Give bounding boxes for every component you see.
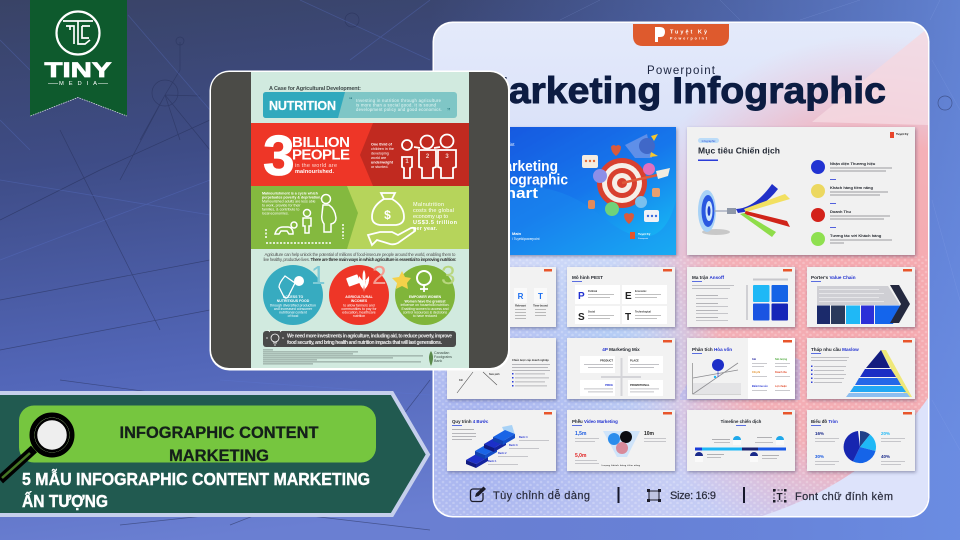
circle: empower women: Women have the greatest	[404, 300, 446, 304]
slide: Timeline chiến dịch: Timeline chiến dịch	[721, 419, 762, 424]
logo tab: Tuyệt Kỳ Powerpoint: Powerpoint	[670, 36, 708, 40]
section: malnutrition cycle and cost: to work, provide for their	[262, 204, 301, 208]
circle: agricultural incomes: nutrition	[353, 314, 365, 318]
logo tab: Tuyệt Kỳ Powerpoint	[633, 24, 729, 46]
section: malnutrition cycle and cost: Malnourishment is a cycle which	[262, 192, 318, 196]
slide: PEST analysis: Technological	[635, 310, 651, 314]
icon: three children	[402, 134, 456, 178]
slide: PEST analysis: E	[625, 291, 632, 302]
slide: SMART goals: Relevant	[515, 304, 526, 308]
pill: Infographic Content Marketing: MARKETING	[169, 446, 269, 465]
logo: small Tuyệt Kỳ: Tuyệt Kỳ	[638, 232, 651, 236]
slide: blue cover	[447, 127, 676, 255]
banner: nutrition quote: Investing in nutrition through agriculture	[356, 98, 442, 103]
section: 3 billion people: One third of	[371, 142, 393, 146]
slide: Ansoff matrix	[687, 267, 795, 327]
icon: magnifying glass	[0, 415, 72, 480]
slide: blue cover: Powerpoint	[492, 142, 515, 147]
slide: PEST analysis: Mô hình PEST	[572, 275, 603, 280]
icon: family lifecycle	[266, 194, 343, 243]
section: 3 billion people: 1	[405, 159, 409, 165]
circle: access to nutritious food: and increased consumer	[274, 307, 313, 311]
slide: Phễu Video Marketing: 5,0m	[575, 453, 587, 459]
section: 3 billion people: in the world are	[295, 163, 337, 169]
section: malnutrition cycle and cost: per year.	[413, 226, 437, 232]
circle: agricultural incomes: AGRICULTURAL	[345, 295, 374, 299]
text block: agriculture intro: live healthy, productive lives. There are three main ways in which agriculture is essential to improving nutrition:	[264, 257, 457, 262]
slide: Phân tích Hòa vốn: Doanh thu	[775, 371, 787, 374]
circle: access to nutritious food: 1	[311, 260, 325, 290]
slide: Biểu đồ Tròn pie chart: Biểu đồ Tròn	[811, 419, 838, 424]
slide: Maslow pyramid	[807, 338, 915, 399]
section: 3 billion people: 2	[426, 154, 430, 160]
slide: Quy trình 4 Bước: Bước 1	[488, 460, 497, 463]
slide: Mục tiêu Chiến dịch: Tuyệt Kỳ	[896, 132, 909, 136]
slide: PEST analysis: T	[625, 312, 631, 323]
footer feature: size 16:9	[647, 489, 716, 502]
slide: Quy trình 4 Bước	[447, 410, 556, 471]
circle: access to nutritious food	[263, 260, 325, 325]
slide: Phễu Video Marketing: 1,5m	[575, 431, 587, 437]
section: malnutrition cycle and cost: costs the global	[413, 208, 454, 214]
slide: Phễu Video Marketing: Lượng khách hàng tiềm năng	[602, 464, 641, 467]
banner: nutrition quote	[263, 92, 457, 118]
slide: 4P Marketing Mix: 4P Marketing Mix	[602, 347, 640, 352]
callout: more investments needed: We need more investments in agriculture, including aid, to reduce poverty, improve	[287, 334, 452, 340]
slide: Biểu đồ Tròn pie chart: 16%	[815, 431, 824, 436]
text block: references and funder logo	[263, 350, 452, 366]
text block: references and funder logo: Canadian	[434, 351, 449, 355]
circle: access to nutritious food: nutritional content	[279, 310, 307, 314]
slide: Biểu đồ Tròn pie chart: 40%	[881, 454, 890, 459]
ribbon: Tiny Media logo: MEDIA	[59, 81, 97, 87]
section: 3 billion people: BILLION	[292, 134, 350, 151]
slide: 4P Marketing Mix: PROMOTIONAL	[630, 383, 650, 387]
section: 3 billion people: PEOPLE	[292, 146, 350, 164]
circle: agricultural incomes: INCOMES	[351, 299, 368, 303]
icon: target with arrow	[597, 158, 670, 208]
slide: Maslow pyramid: Tháp nhu cầu Maslow	[811, 347, 859, 352]
slide: blue cover: Main	[512, 231, 522, 236]
slide: PEST analysis	[567, 267, 675, 327]
circle: access to nutritious food: through diversified production	[270, 304, 316, 308]
slide: Phân tích Hòa vốn: Điểm hòa vốn	[752, 385, 768, 388]
circle: empower women: EMPOWER WOMEN	[409, 295, 442, 299]
circle: agricultural incomes: to allow farmers and	[343, 304, 375, 308]
slide: Mục tiêu Chiến dịch: Infographic	[702, 139, 716, 143]
section: malnutrition cycle and cost: Malnutrition	[413, 202, 444, 208]
circle: empower women: Enabling women to access and	[402, 307, 449, 311]
slide: Quy trình 4 Bước: Bước 4	[519, 436, 528, 439]
banner: nutrition quote: is more than a social good. It is sound	[356, 102, 437, 108]
heading: ấn tượng: ẤN TƯỢNG	[22, 490, 108, 511]
slide: Biểu đồ Tròn pie chart: 20%	[881, 431, 890, 436]
slide: 4P Marketing Mix: PRODUCT	[600, 358, 613, 362]
section: malnutrition cycle and cost: economy up to	[413, 214, 448, 220]
circle: empower women: influence on household nutrition.	[401, 303, 449, 307]
subtitle: Powerpoint: Powerpoint	[647, 65, 716, 77]
slide: Phân tích Hòa vốn: Giá	[752, 358, 757, 361]
circle: agricultural incomes	[329, 260, 389, 325]
list: campaign goals: Nhận diện Thương hiệu	[830, 161, 876, 166]
slide: PEST analysis: S	[578, 312, 585, 323]
section: 3 billion people: 3	[263, 124, 295, 188]
pill: Infographic Content Marketing	[19, 406, 376, 465]
section: 3 billion people	[251, 123, 469, 188]
banner: nutrition quote: “	[349, 97, 352, 104]
slide: SMART goals: R	[518, 292, 524, 301]
section: 3 billion people: developing	[371, 152, 389, 156]
list: campaign goals: Khách hàng tiềm năng	[830, 185, 873, 190]
section: malnutrition cycle and cost: Malnourished adults are less able	[262, 200, 316, 204]
slide: Mục tiêu Chiến dịch: Mục tiêu Chiến dịch	[698, 146, 780, 156]
slide: break-even chart: Kill	[459, 379, 463, 382]
slide: Quy trình 4 Bước: Quy trình 4 Bước	[452, 419, 489, 424]
slide: SMART goals: T	[538, 292, 543, 301]
circle: empower women	[392, 260, 455, 325]
slide: Quy trình 4 Bước: Bước 3	[509, 444, 518, 447]
slide: Phân tích Hòa vốn	[687, 338, 795, 399]
slide: Phân tích Hòa vốn: Sản lượng	[775, 358, 788, 361]
circle: access to nutritious food: NUTRITIOUS FOOD	[277, 299, 310, 303]
logo tab: Tuyệt Kỳ Powerpoint: Tuyệt Kỳ	[670, 30, 708, 36]
footer feature: easy customization: Tùy chỉnh dễ dàng	[493, 489, 590, 502]
divider	[743, 487, 745, 503]
icon: TC monogram	[56, 12, 100, 54]
section: 3 billion people: children in the	[371, 147, 394, 151]
text block: agriculture intro: Agriculture can help unlock the potential of millions of food-insecure people around the world, enabling them to	[264, 252, 456, 257]
slide: Mục tiêu Chiến dịch	[687, 127, 915, 255]
icon: target with ribbons	[698, 184, 790, 237]
text block: agriculture intro	[264, 252, 457, 262]
section: malnutrition cycle and cost: $	[384, 208, 391, 222]
text block: references and funder logo: Bank	[434, 359, 442, 363]
list: campaign goals	[811, 160, 892, 246]
circle: agricultural incomes: 2	[372, 260, 386, 290]
section: 3 billion people: world are	[371, 156, 386, 160]
icon: social reaction bubbles	[582, 145, 660, 224]
slide: break-even chart: New path	[489, 373, 500, 376]
icon: megaphone	[625, 134, 658, 158]
banner: article title	[0, 393, 428, 515]
circle: empower women: to have reduced	[413, 314, 437, 318]
section: malnutrition cycle and cost: families, & contribute to	[262, 208, 299, 212]
footer feature: attached font: Font chữ đính kèm	[795, 491, 893, 503]
slide: blue cover: Marketing	[493, 159, 558, 175]
pill: Infographic Content Marketing: INFOGRAPHIC CONTENT	[120, 423, 319, 442]
section: 3 billion people: underweight	[371, 160, 394, 164]
slide: Biểu đồ Tròn pie chart	[807, 410, 915, 471]
icon: money bag in hand	[368, 193, 415, 245]
slide: Phân tích Hòa vốn: Phân tích Hòa vốn	[692, 346, 732, 352]
title: Marketing Infographic: Marketing Infographic	[476, 70, 886, 111]
logo: small Tuyệt Kỳ	[630, 232, 651, 240]
slide: SMART goals	[447, 267, 556, 327]
circle: empower women: 3	[441, 260, 455, 290]
circle: agricultural incomes: communities to pay for	[341, 307, 377, 311]
callout: more investments needed	[263, 330, 456, 347]
banner: nutrition quote: NUTRITION	[269, 99, 336, 113]
slide: blue cover: Chart	[493, 186, 538, 202]
heading: A Case for Agricultural Development: A Case for Agricultural Development:	[269, 86, 361, 92]
ribbon: Tiny Media logo: TINY	[44, 58, 112, 82]
divider	[618, 487, 620, 503]
slide: 4P Marketing Mix: PLACE	[630, 358, 639, 362]
slide: Porter's Value Chain: Porter's Value Chain	[811, 275, 856, 280]
callout: more investments needed: food security, and bring health and nutrition impacts that will last generations.	[287, 340, 443, 346]
ribbon: Tiny Media logo	[30, 0, 127, 116]
slide: Quy trình 4 Bước: Bước 2	[498, 452, 507, 455]
chart: pie	[844, 431, 876, 463]
slide: Phễu Video Marketing	[567, 410, 675, 471]
banner: nutrition quote: ”	[447, 108, 450, 115]
slide: Phân tích Hòa vốn: Lợi nhuận	[775, 385, 787, 388]
panel: Marketing Infographic PowerPoint preview	[432, 22, 930, 518]
slide: PEST analysis: P	[578, 291, 585, 302]
slide: 4P Marketing Mix	[567, 338, 675, 399]
circle: access to nutritious food: of food	[288, 314, 298, 318]
slide: PEST analysis: Political	[588, 290, 598, 293]
section: malnutrition cycle and cost	[251, 186, 469, 249]
section: 3 billion people: or stunted.	[371, 165, 388, 169]
section: malnutrition cycle and cost: US$3.5 trillion	[413, 220, 458, 226]
logo: small Tuyệt Kỳ: Powerpoint	[638, 237, 648, 240]
slide: blue cover: / Tuyetkipowerpoint	[512, 237, 540, 241]
footer feature: size 16:9: Size: 16:9	[670, 490, 716, 502]
slide: SMART goals: Time-bound	[533, 304, 548, 308]
circle: empower women: control resources & decisions	[403, 310, 447, 314]
slide: Ansoff matrix: Ma trận Ansoff	[692, 275, 724, 280]
slide: Phễu Video Marketing: 10m	[644, 431, 655, 437]
slide: break-even chart	[447, 338, 556, 399]
slide: Phân tích Hòa vốn: Chi phí	[752, 371, 760, 374]
slide: Timeline chiến dịch	[687, 410, 795, 471]
slide: PEST analysis: Social	[588, 310, 595, 314]
section: malnutrition cycle and cost: local economies.	[262, 212, 289, 216]
slide: break-even chart: Chiến lược cấp doanh nghiệp	[512, 358, 549, 362]
slide: blue cover: Infographic	[493, 172, 568, 188]
footer feature: attached font: T	[776, 492, 783, 503]
section: malnutrition cycle and cost: perpetuates poverty & deprivation.	[262, 196, 321, 200]
section: 3 billion people: malnourished.	[295, 169, 334, 175]
slide: 4P Marketing Mix: PRICE	[605, 383, 613, 387]
section: 3 billion people: 3	[445, 154, 449, 160]
slide: Biểu đồ Tròn pie chart: 30%	[815, 454, 824, 459]
slide: Phễu Video Marketing: Phễu Video Marketing	[572, 419, 618, 424]
slide: PEST analysis: Economic	[635, 290, 647, 293]
banner: nutrition quote: development policy and good economics.	[356, 107, 442, 112]
circle: access to nutritious food: ACCESS TO	[283, 295, 303, 299]
list: campaign goals: Tương tác với Khách hàng	[830, 233, 882, 238]
list: campaign goals: Doanh Thu	[830, 209, 851, 214]
heading: 5 mẫu infographic: 5 MẪU INFOGRAPHIC CONTENT MARKETING	[22, 468, 370, 489]
circle: agricultural incomes: education, healthcare	[342, 310, 376, 314]
footer feature: easy customization	[470, 486, 590, 502]
panel: agricultural nutrition infographic card	[210, 70, 510, 370]
text block: references and funder logo: Foodgrains	[434, 355, 452, 359]
slide: Porter's Value Chain	[807, 267, 915, 327]
